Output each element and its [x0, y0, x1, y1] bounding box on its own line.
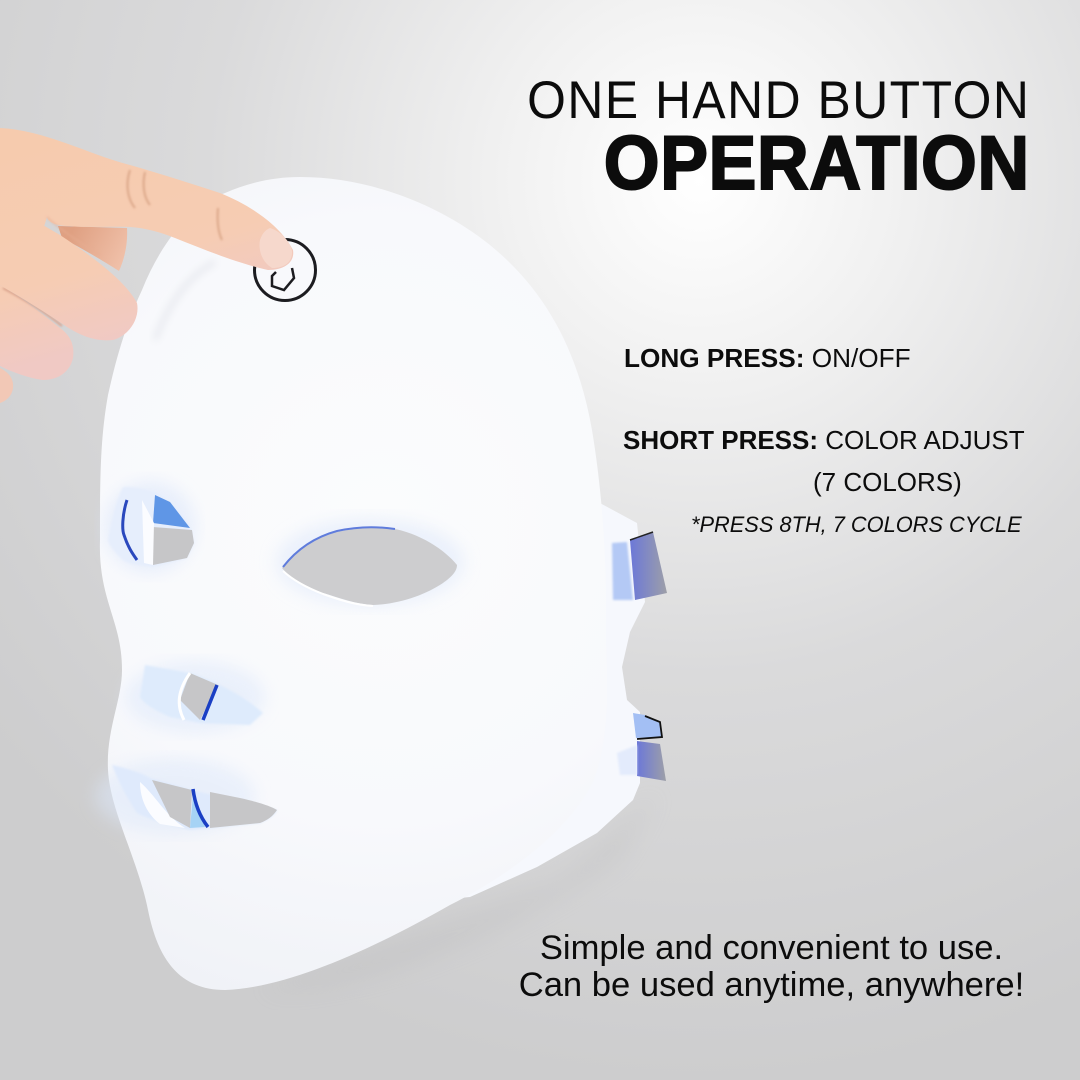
knuckle creases	[128, 170, 222, 240]
middle finger behind	[58, 226, 127, 271]
right eye opening	[276, 518, 464, 606]
closing tagline	[519, 929, 1024, 1004]
seven colors: (7 COLORS)	[813, 467, 962, 497]
index finger	[0, 128, 293, 270]
hand pressing button	[0, 128, 293, 403]
fingernail	[260, 228, 292, 268]
little finger	[0, 368, 13, 403]
forehead lip highlight	[155, 262, 215, 340]
heading line two: OPERATION	[604, 121, 1030, 206]
closing tagline: Simple and convenient to use.	[540, 929, 1003, 967]
closing tagline: Can be used anytime, anywhere!	[519, 966, 1024, 1004]
left eye opening	[104, 481, 196, 573]
power button icon	[254, 240, 316, 300]
lower strap clip	[617, 713, 666, 781]
mouth opening	[95, 758, 277, 834]
instructions text	[623, 343, 1025, 537]
ring finger	[0, 285, 73, 380]
nose opening	[125, 661, 265, 733]
third finger	[0, 200, 138, 340]
cycle note: *PRESS 8TH, 7 COLORS CYCLE	[691, 512, 1022, 537]
side shell	[440, 500, 645, 900]
mask shadow	[260, 790, 660, 990]
heading line one: ONE HAND BUTTON	[527, 71, 1030, 130]
short press: SHORT PRESS: COLOR ADJUST	[623, 425, 1025, 455]
heading	[527, 71, 1030, 206]
long press: LONG PRESS: ON/OFF	[624, 343, 911, 373]
upper strap clip	[612, 532, 667, 600]
mask body	[100, 177, 607, 990]
